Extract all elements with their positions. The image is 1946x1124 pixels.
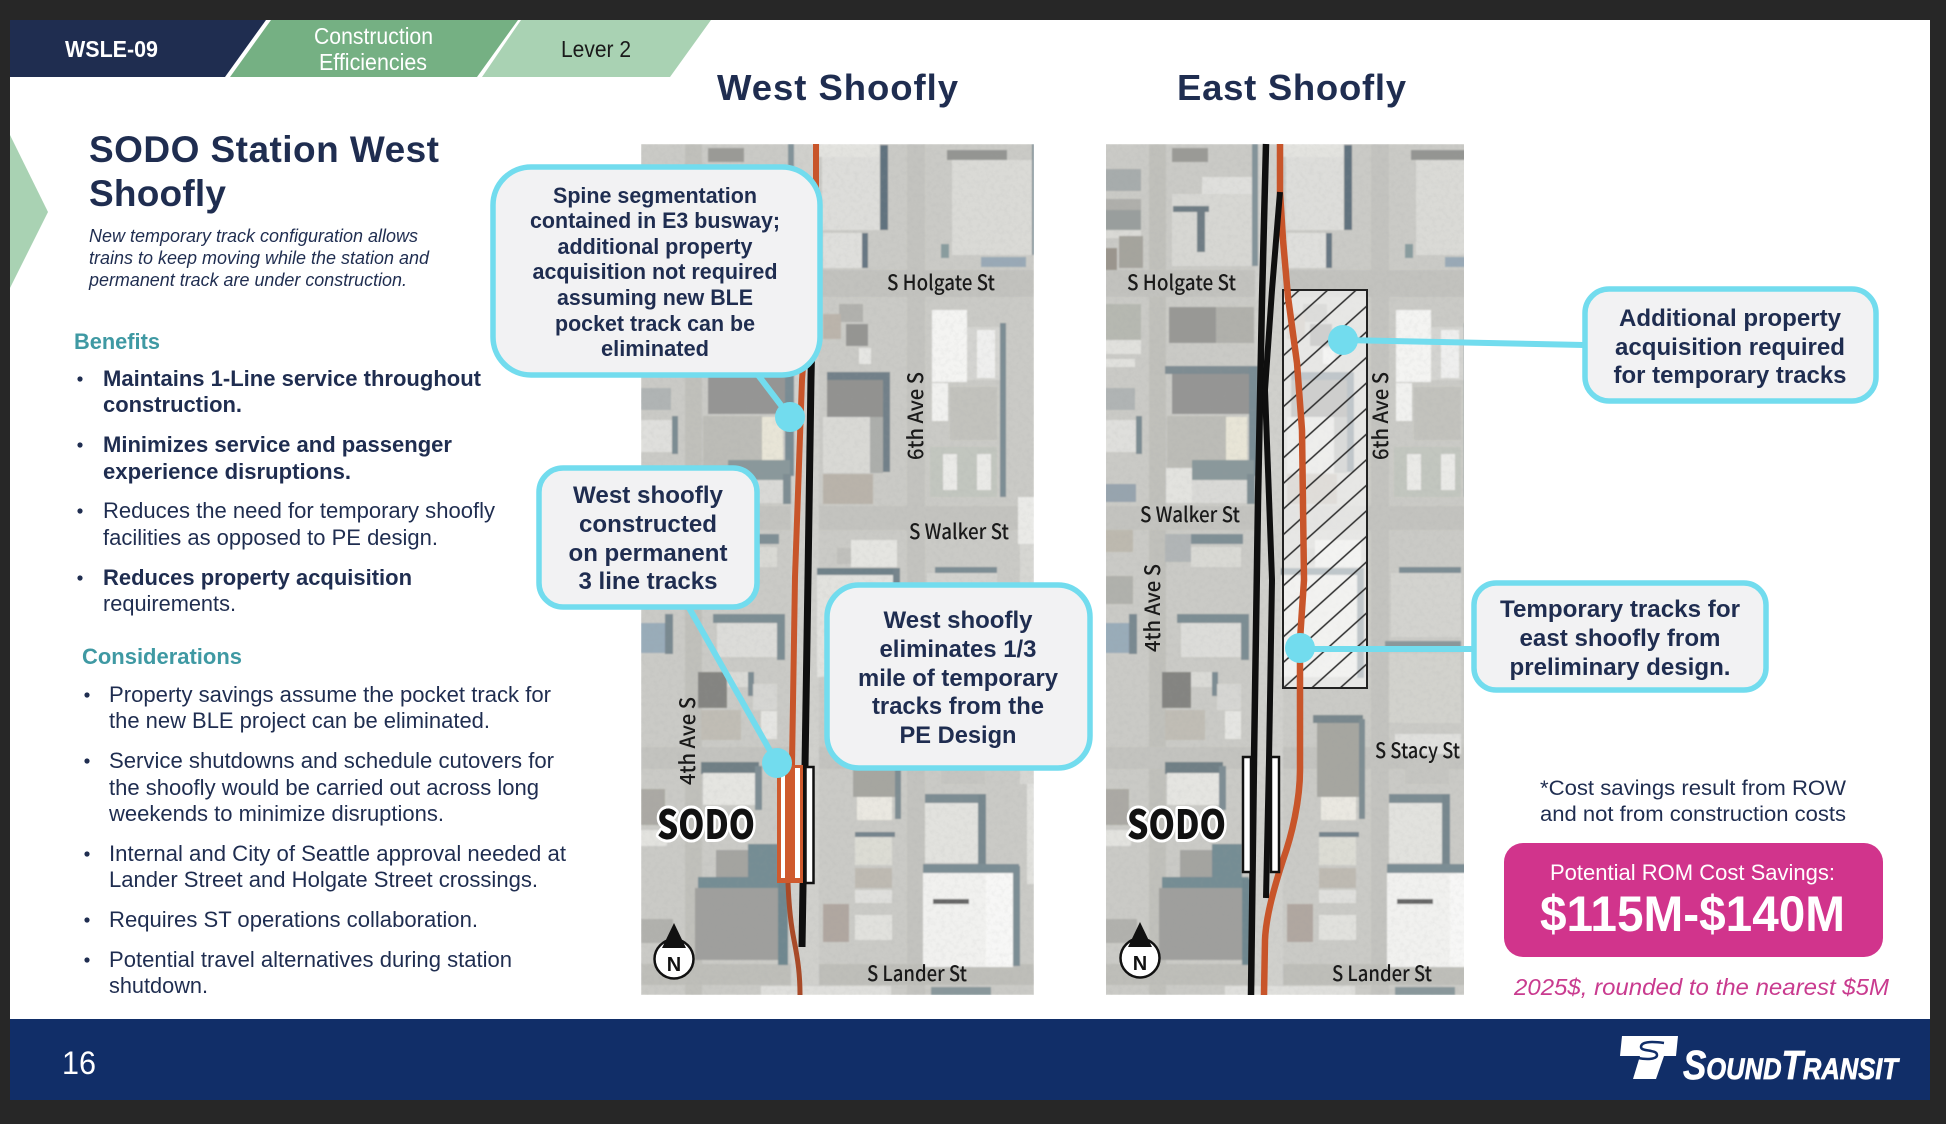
- icon: north arrow: N: [1133, 953, 1147, 975]
- icon: north arrow: N: [667, 954, 681, 976]
- callout: Temporary tracks for east shoofly: [1285, 583, 1766, 690]
- callout: West shoofly eliminates 1/3 mile: eliminates 1/3: [880, 636, 1036, 663]
- station label: SODO: SODO: [657, 793, 755, 851]
- panel: potential savings: $115M-$140M: [1540, 886, 1845, 942]
- footer bar: [10, 1019, 1930, 1100]
- callout: spine segmentation: Spine segmentation: [553, 183, 757, 208]
- heading: Considerations: Considerations: [82, 644, 242, 669]
- benefits list: requirements.: [103, 591, 236, 616]
- station: black platform: [806, 767, 814, 883]
- icon: north arrow: [1120, 922, 1160, 978]
- callout: West shoofly eliminates 1/3 mile: tracks from the: [872, 693, 1044, 720]
- panel: potential savings: [1504, 843, 1883, 957]
- track: existing black alignment: [802, 330, 812, 947]
- map labels: [672, 267, 1009, 988]
- benefits list: Minimizes service and passenger: [103, 432, 452, 457]
- logo: Sound Transit: [1620, 1036, 1900, 1088]
- considerations list: the new BLE project can be eliminated.: [109, 708, 490, 733]
- benefits list: Maintains 1-Line service throughout: [103, 366, 482, 391]
- considerations list: Property savings assume the pocket track for: [109, 682, 551, 707]
- map: West Shoofly: [641, 144, 1034, 995]
- map labels: S Lander St: [867, 958, 967, 988]
- panel: potential savings: Potential ROM Cost Savings:: [1550, 860, 1835, 885]
- station: platforms: [1243, 757, 1279, 872]
- considerations list: [84, 682, 566, 998]
- callout: Additional property acquisition: [1328, 289, 1876, 401]
- note: cost savings source: and not from construction costs: [1540, 802, 1846, 826]
- note: cost savings source: [1540, 776, 1847, 826]
- tag: WSLE-09: WSLE-09: [65, 36, 158, 62]
- track: west orange alignment: [792, 144, 816, 765]
- station: orange platforms: [777, 765, 803, 883]
- icon: north arrow: [654, 923, 694, 978]
- considerations list: weekends to minimize disruptions.: [108, 801, 444, 826]
- zone: additional property hatch: [1283, 290, 1367, 688]
- subtitle: [88, 225, 430, 290]
- callout: Temporary tracks for east shoofly: preliminary design.: [1510, 654, 1730, 681]
- considerations list: Requires ST operations collaboration.: [109, 907, 478, 932]
- callout: Temporary tracks for east shoofly: Temporary tracks for: [1500, 596, 1740, 623]
- tag: Lever 2: [482, 20, 711, 77]
- considerations list: Service shutdowns and schedule cutovers for: [109, 748, 554, 773]
- track: orange tail: [788, 883, 800, 995]
- map labels: S Holgate St: [1127, 267, 1236, 297]
- callout: Additional property acquisition: Additional property: [1619, 305, 1841, 332]
- considerations section: [82, 644, 566, 998]
- map labels: S Walker St: [909, 516, 1009, 546]
- map labels: 4th Ave S: [672, 697, 702, 785]
- subtitle: permanent track are under construction.: [88, 269, 407, 290]
- callout: spine segmentation: additional property: [558, 234, 753, 259]
- title: Shoofly: [89, 173, 226, 214]
- tag: WSLE-09: [10, 20, 266, 77]
- callout: spine segmentation: contained in E3 busway;: [530, 208, 780, 233]
- note: rounding: 2025$, rounded to the nearest $5M: [1513, 974, 1890, 1000]
- tag: Construction Efficiencies: Construction: [314, 23, 433, 49]
- map labels: 4th Ave S: [1137, 564, 1167, 652]
- tag: Construction Efficiencies: Efficiencies: [319, 49, 427, 75]
- callout: Additional property acquisition: for temporary tracks: [1614, 362, 1846, 389]
- considerations list: shutdown.: [109, 973, 208, 998]
- considerations list: the shoofly would be carried out across long: [109, 775, 539, 800]
- map labels: 6th Ave S: [1365, 372, 1395, 460]
- station label: SODO: SODO: [1127, 793, 1226, 851]
- tag: Lever 2: Lever 2: [561, 36, 631, 62]
- callout: West shoofly on permanent 3 line tracks: West shoofly: [573, 482, 723, 509]
- map labels: S Holgate St: [887, 267, 995, 297]
- tag: Construction Efficiencies: [230, 20, 518, 77]
- benefits list: [77, 366, 495, 616]
- callout: spine segmentation: [493, 167, 820, 432]
- considerations list: Potential travel alternatives during station: [109, 947, 512, 972]
- callout: West shoofly eliminates 1/3 mile: PE Design: [900, 722, 1016, 749]
- aerial base: [1105, 144, 1498, 995]
- callout: West shoofly on permanent 3 line tracks: on permanent: [568, 540, 728, 567]
- benefits list: Reduces property acquisition: [103, 565, 412, 590]
- callout: West shoofly eliminates 1/3 mile: West shoofly: [884, 607, 1033, 634]
- subtitle: trains to keep moving while the station and: [89, 247, 430, 268]
- logo: Sound Transit: SOUNDTRANSIT: [1683, 1042, 1900, 1088]
- callout: spine segmentation: eliminated: [601, 336, 709, 361]
- callout: spine segmentation: pocket track can be: [555, 311, 755, 336]
- callout: West shoofly on permanent 3 line tracks: constructed: [579, 511, 717, 538]
- note: cost savings source: *Cost savings result from ROW: [1540, 776, 1847, 800]
- heading: West Shoofly: West Shoofly: [717, 67, 959, 108]
- track: temporary orange alignment: [1264, 144, 1304, 995]
- callout: West shoofly eliminates 1/3 mile: mile of temporary: [858, 665, 1058, 692]
- benefits list: Reduces the need for temporary shoofly: [103, 498, 495, 523]
- title: SODO Station West: [89, 129, 439, 170]
- map labels: S Lander St: [1332, 958, 1432, 988]
- callout: West shoofly eliminates 1/3 mile: [827, 585, 1090, 768]
- map labels: S Stacy St: [1375, 735, 1460, 765]
- aerial base: [641, 144, 1034, 995]
- page number: 16: [62, 1045, 96, 1081]
- track: black alignment 1: [1251, 144, 1266, 995]
- header banner: [10, 20, 711, 77]
- benefits list: construction.: [103, 392, 242, 417]
- map labels: 6th Ave S: [900, 372, 930, 460]
- map: East Shoofly: [1105, 144, 1498, 995]
- map labels: S Walker St: [1140, 499, 1240, 529]
- map labels: [1127, 267, 1460, 988]
- callout: spine segmentation: acquisition not required: [532, 259, 778, 284]
- callout: Additional property acquisition: acquisition required: [1615, 334, 1845, 361]
- title: [89, 129, 439, 214]
- considerations list: Lander Street and Holgate Street crossings.: [109, 867, 538, 892]
- heading: East Shoofly: East Shoofly: [1177, 67, 1407, 108]
- callout: spine segmentation: assuming new BLE: [557, 285, 753, 310]
- callout: Temporary tracks for east shoofly: east shoofly from: [1520, 625, 1720, 652]
- subtitle: New temporary track configuration allows: [89, 225, 418, 246]
- callout: West shoofly on permanent 3 line tracks: [539, 468, 792, 778]
- left chevron accent: [10, 135, 48, 288]
- callout: West shoofly on permanent 3 line tracks: 3 line tracks: [578, 568, 718, 595]
- heading: Benefits: Benefits: [74, 329, 160, 354]
- considerations list: Internal and City of Seattle approval needed at: [109, 841, 566, 866]
- benefits list: facilities as opposed to PE design.: [103, 525, 438, 550]
- track: black alignment 2: [1265, 192, 1280, 898]
- benefits section: [74, 329, 495, 616]
- benefits list: experience disruptions.: [103, 459, 351, 484]
